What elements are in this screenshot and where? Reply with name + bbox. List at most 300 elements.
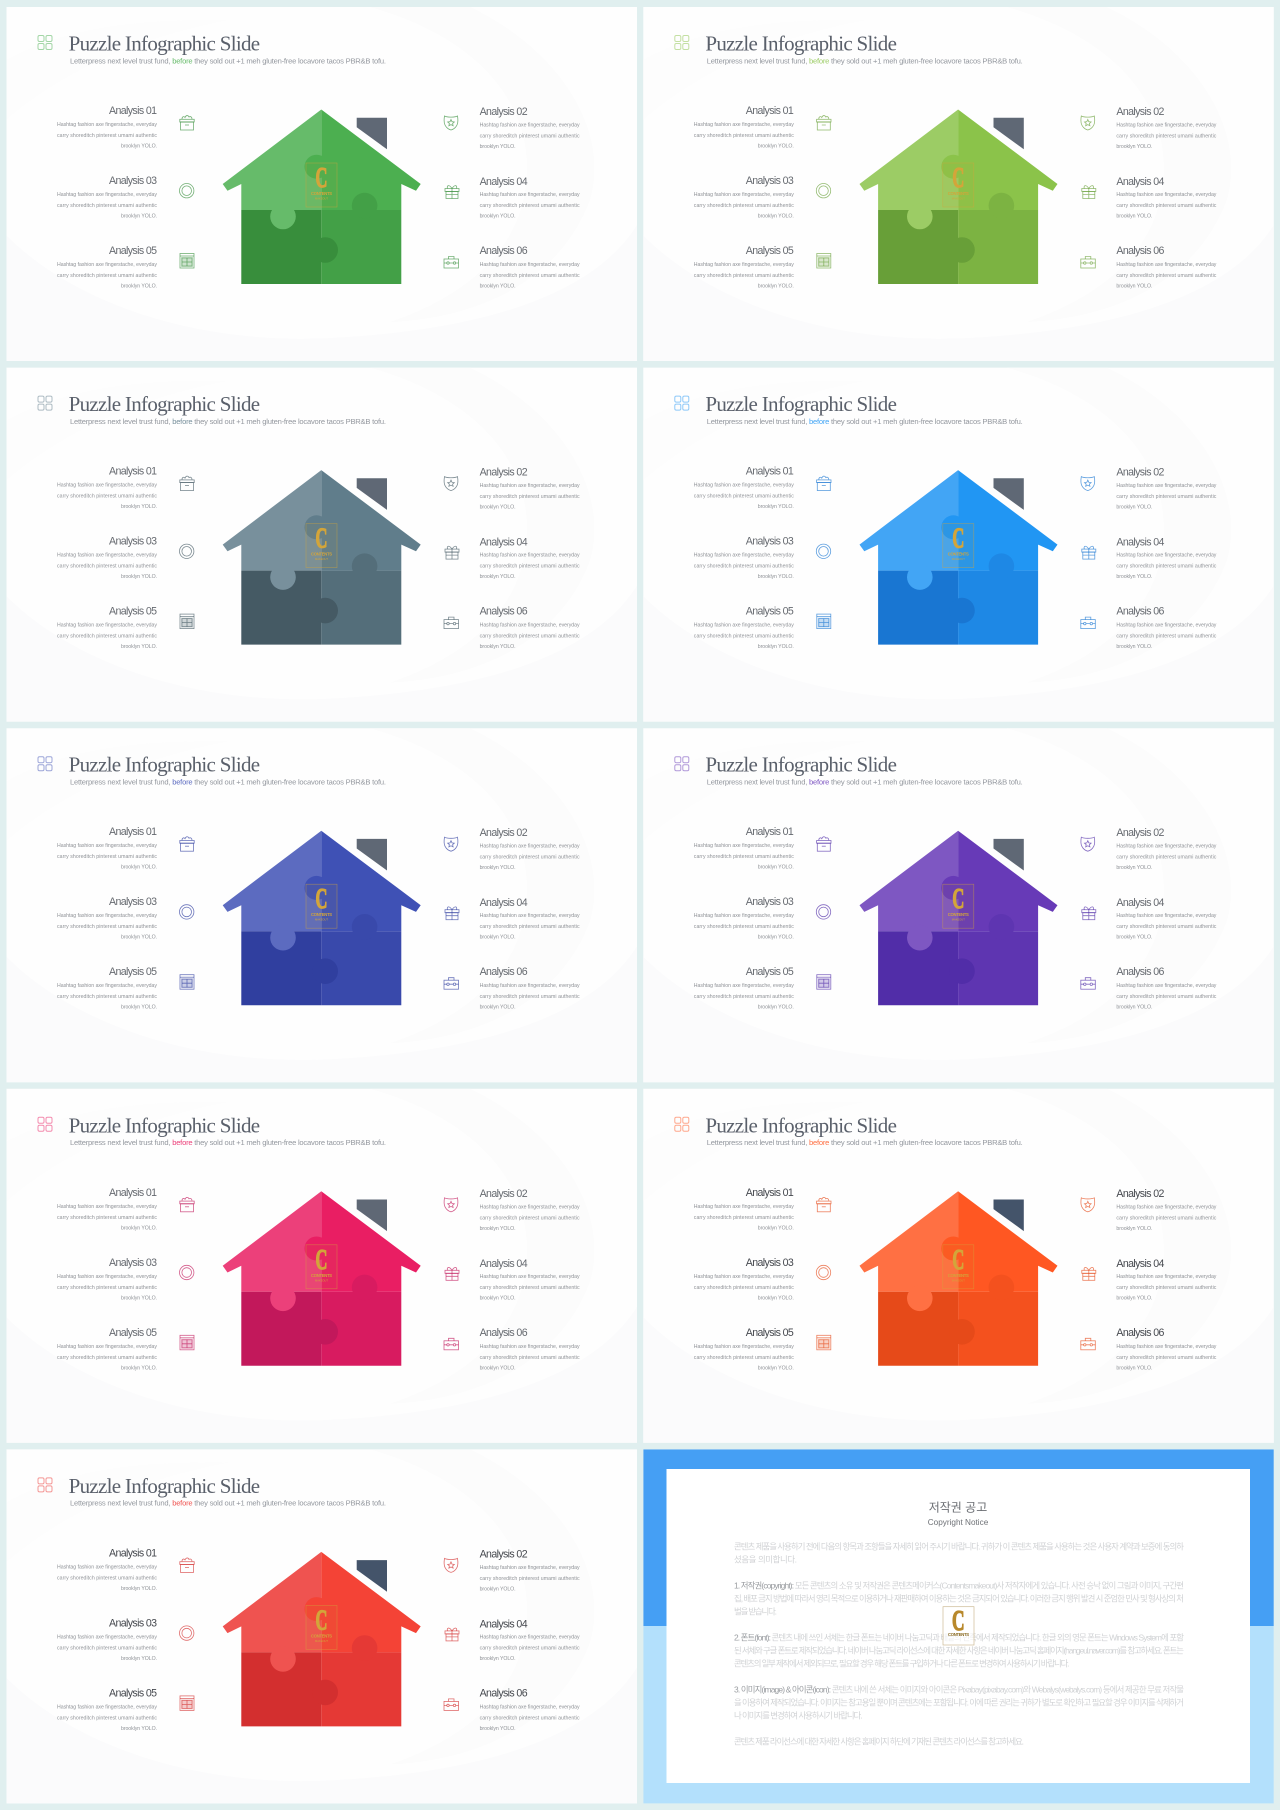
watermark logo: C [316,162,327,194]
text block: analysis 01: carry shoreditch pinterest umami authentic [694,1215,794,1221]
icon: calendar [180,254,194,268]
text block: analysis 06: Hashtag fashion axe fingerstache, everyday [1116,1344,1217,1350]
subheading: Copyright Notice [928,1518,989,1527]
watermark logo: C [952,1606,965,1637]
icon: gift [445,1267,459,1280]
icon: life ring [180,184,194,198]
text block: analysis 02: Analysis 02 [480,1548,528,1560]
text block: analysis 02 [480,827,580,871]
text block: analysis 05: Analysis 05 [746,1327,794,1339]
text block: analysis 04: Hashtag fashion axe fingerstache, everyday [480,1634,580,1640]
text block: analysis 02: Analysis 02 [480,467,528,479]
text block: analysis 03: Analysis 03 [109,1617,157,1629]
text block: analysis 06 [480,1687,580,1732]
icon: header grid [675,396,689,410]
text block: analysis 03: Hashtag fashion axe fingerstache, everyday [57,553,157,559]
text block: analysis 06: Hashtag fashion axe fingerstache, everyday [480,262,580,268]
title: Puzzle Infographic Slide [705,32,897,56]
subtitle: Letterpress next level trust fund, before they sold out +1 meh gluten-free locavore tacos PBR&B tofu. [70,1138,386,1147]
text block: analysis 01: Analysis 01 [109,105,157,117]
subtitle: Letterpress next level trust fund, before they sold out +1 meh gluten-free locavore tacos PBR&B tofu. [707,1138,1023,1147]
icon: box [817,837,831,851]
text block: analysis 04: Hashtag fashion axe fingerstache, everyday [480,913,580,919]
icon: header grid [38,1478,52,1492]
text block: analysis 04: Hashtag fashion axe fingerstache, everyday [480,553,580,559]
text block: analysis 04: Analysis 04 [480,1618,528,1630]
text block: analysis 01: Analysis 01 [109,826,157,838]
watermark logo: C [316,1605,327,1637]
text block: analysis 04 [480,176,580,220]
text block: analysis 01: Analysis 01 [746,105,794,117]
text block: analysis 01: Analysis 01 [109,466,157,478]
watermark logo: C [316,523,327,555]
text block: analysis 01: carry shoreditch pinterest umami authentic [57,494,157,500]
text block: analysis 04: brooklyn YOLO. [480,574,516,580]
text block: analysis 05: Hashtag fashion axe fingerstache, everyday [57,1704,157,1710]
watermark logo: CONTENTS [311,552,332,557]
text block: analysis 03: brooklyn YOLO. [121,214,157,220]
text block: analysis 03: Analysis 03 [109,536,157,548]
text block: analysis 01: carry shoreditch pinterest umami authentic [57,1575,157,1581]
panel: light green puzzle house slide [643,7,1274,361]
text block: analysis 01: carry shoreditch pinterest umami authentic [57,133,157,139]
title: Puzzle Infographic Slide [69,32,260,56]
text block: analysis 04 [480,897,580,941]
text block: analysis 05: carry shoreditch pinterest umami authentic [694,634,794,640]
text block: analysis 03: carry shoreditch pinterest umami authentic [694,924,794,930]
text block: analysis 05 [57,1687,157,1732]
text block: analysis 06: Analysis 06 [1116,1327,1164,1339]
text block: analysis 05: Analysis 05 [109,245,157,257]
text block: analysis 03: brooklyn YOLO. [758,1295,794,1301]
icon: gift [1082,546,1096,559]
text block: analysis 03: Hashtag fashion axe fingerstache, everyday [57,1634,157,1640]
text block: analysis 06: Hashtag fashion axe fingerstache, everyday [1116,262,1217,268]
text block: analysis 05: brooklyn YOLO. [758,1005,794,1011]
chimney [357,478,387,510]
text block: analysis 01: brooklyn YOLO. [121,504,157,510]
icon: header grid [38,36,52,50]
panel: pink puzzle house slide [6,1088,637,1443]
text block: analysis 01 [57,826,157,871]
text block: analysis 06 [1116,245,1217,290]
text block: font: 2. 폰트(font): 콘텐츠 내에 쓰인 서체는 한글 폰트는 네이버 나눔고딕과 배달의 민족에서 제작되었습니다. 한글 외의 영문 폰트는 Windows System에 포함 [734,1632,1184,1642]
text block: analysis 03 [694,896,794,941]
text block: analysis 05: Hashtag fashion axe fingerstache, everyday [57,262,157,268]
text block: analysis 06: brooklyn YOLO. [1116,1005,1152,1011]
watermark logo: MAKEOUT [952,1278,965,1282]
watermark logo [943,162,974,207]
panel: indigo puzzle house slide [6,728,637,1082]
text block: analysis 03: brooklyn YOLO. [121,1656,157,1662]
text block: analysis 05: carry shoreditch pinterest umami authentic [694,994,794,1000]
text block: analysis 02: brooklyn YOLO. [1116,144,1152,150]
text block: analysis 05: brooklyn YOLO. [758,284,794,290]
puzzle house [860,1191,1058,1366]
text block: analysis 02: Analysis 02 [480,1188,528,1200]
text block: analysis 02 [480,1548,580,1592]
text block: analysis 05 [57,966,157,1011]
icon: toolbox [1081,617,1095,629]
icon: header grid [675,757,689,771]
watermark logo [943,1244,974,1289]
icon: life ring [180,1626,194,1640]
watermark logo [306,162,337,207]
text block: analysis 02: brooklyn YOLO. [1116,865,1152,871]
text block: analysis 06: brooklyn YOLO. [480,1005,516,1011]
text block: analysis 05: Analysis 05 [109,966,157,978]
text block: analysis 05: brooklyn YOLO. [121,284,157,290]
subtitle: Letterpress next level trust fund, before they sold out +1 meh gluten-free locavore tacos PBR&B tofu. [707,417,1023,426]
text block: analysis 06: Hashtag fashion axe fingerstache, everyday [480,1704,580,1710]
text block: analysis 03: Analysis 03 [746,1257,794,1269]
icon: gift [1082,186,1096,198]
text block: analysis 01: Analysis 01 [109,1187,157,1199]
text block: analysis 02 [1116,467,1217,511]
icon: gift [445,907,459,920]
watermark logo [306,1605,337,1649]
text block: analysis 01 [694,826,794,871]
icon: shield [1081,116,1095,130]
title: Puzzle Infographic Slide [705,1113,897,1137]
text block: analysis 04: brooklyn YOLO. [480,1295,516,1301]
text block: copyright: 1. 저작권(copyright): 모든 콘텐츠의 소유 및 저작권은 콘텐츠메이커스(Contentsmakeout)사 저작자에게 있습니다. 사전 승낙 없이 그림과 이미지, 구간편 [734,1581,1184,1591]
chimney [357,1560,387,1592]
text block: analysis 04: brooklyn YOLO. [1116,574,1152,580]
icon: calendar [180,975,194,989]
icon: life ring [180,905,194,919]
text block: analysis 02: brooklyn YOLO. [480,505,516,511]
text block: analysis 05: Hashtag fashion axe fingerstache, everyday [57,983,157,989]
watermark logo [306,884,337,928]
watermark logo [943,884,974,928]
subtitle: Letterpress next level trust fund, before they sold out +1 meh gluten-free locavore tacos PBR&B tofu. [70,417,386,426]
text block: analysis 06: Analysis 06 [1116,966,1164,978]
text block: analysis 03: Analysis 03 [109,896,157,908]
text block: analysis 04 [480,1258,580,1301]
watermark logo: C [952,1244,964,1276]
text block: analysis 06: Hashtag fashion axe fingerstache, everyday [1116,983,1217,989]
text block: analysis 01: Analysis 01 [746,1187,794,1199]
text block: analysis 03 [57,175,157,220]
text block: analysis 01 [57,105,157,150]
text block: analysis 02: Hashtag fashion axe fingerstache, everyday [1116,1204,1217,1210]
text block: analysis 02: carry shoreditch pinterest umami authentic [1116,855,1217,861]
text block: analysis 06: brooklyn YOLO. [480,1365,516,1371]
text block: font: 콘텐츠의 일부 제작에서 제외되므로, 필요할 경우 해당 폰트를 구입하거나 다른 폰트로 변경하여 사용하시기 바랍니다. [734,1658,1070,1668]
text block: analysis 03: Hashtag fashion axe fingerstache, everyday [694,553,794,559]
text block: analysis 06: brooklyn YOLO. [480,644,516,650]
title: Puzzle Infographic Slide [69,1113,260,1137]
text block: analysis 02: Analysis 02 [480,106,528,118]
text block: analysis 02: carry shoreditch pinterest umami authentic [480,855,580,861]
icon: toolbox [444,617,458,629]
icon: calendar [180,1335,194,1350]
icon: shield [444,116,458,130]
text block: analysis 04: carry shoreditch pinterest umami authentic [480,1285,580,1291]
text block: analysis 03 [694,175,794,220]
icon: shield [444,1198,458,1212]
watermark logo: CONTENTS [948,1273,969,1278]
text block: analysis 02: brooklyn YOLO. [1116,505,1152,511]
text block: analysis 05: brooklyn YOLO. [121,644,157,650]
watermark logo: CONTENTS [948,1632,969,1637]
text block: analysis 04: brooklyn YOLO. [480,935,516,941]
icon: box [180,1197,194,1212]
text block: analysis 06: Analysis 06 [480,1327,528,1339]
icon: shield [1081,477,1095,491]
icon: header grid [38,757,52,771]
text block: analysis 05: carry shoreditch pinterest umami authentic [57,994,157,1000]
text block: analysis 02: carry shoreditch pinterest umami authentic [1116,134,1217,140]
text block: analysis 02: Analysis 02 [1116,467,1164,479]
text block: analysis 05: Hashtag fashion axe fingerstache, everyday [694,623,794,629]
panel: blue grey puzzle house slide [6,368,637,722]
watermark logo [943,523,974,568]
text block: analysis 06: Hashtag fashion axe fingerstache, everyday [1116,623,1217,629]
text block: copyright: 집, 배포 금지 방법에 따라서 영리 목적으로 이용하거나 재판매하여 이용하는 것은 금지되어 있습니다. 이러한 금지 행위 발견 시 준엄한 민사 및 형사상의 처 [734,1593,1184,1603]
text block: analysis 02: brooklyn YOLO. [480,1226,516,1232]
text block: intro: 콘텐츠 제품을 사용하기 전에 다음의 항목과 조항들을 자세히 읽어 주시기 바랍니다. 귀하가 이 콘텐츠 제품을 사용하는 것은 사용자 계약과 보증에 동의하 [734,1542,1184,1552]
text block: analysis 06: Analysis 06 [480,606,528,618]
text block: analysis 06: Hashtag fashion axe fingerstache, everyday [480,623,580,629]
text block: analysis 03: Analysis 03 [109,175,157,187]
puzzle house [860,470,1058,645]
text block: analysis 01: carry shoreditch pinterest umami authentic [694,854,794,860]
text block: analysis 03: Hashtag fashion axe fingerstache, everyday [694,913,794,919]
text block: analysis 03: carry shoreditch pinterest umami authentic [694,203,794,209]
text block: analysis 02: Hashtag fashion axe fingerstache, everyday [480,122,580,128]
text block: analysis 04 [1116,897,1217,941]
text block: analysis 05: Analysis 05 [746,966,794,978]
puzzle house [223,110,421,284]
text block: analysis 02: carry shoreditch pinterest umami authentic [480,1215,580,1221]
text block: analysis 01: Hashtag fashion axe fingerstache, everyday [57,122,157,128]
text block: analysis 05 [57,606,157,650]
text block: analysis 05 [57,245,157,290]
text block: analysis 06: Analysis 06 [480,245,528,257]
text block: analysis 04: Analysis 04 [1116,176,1164,188]
text block: analysis 03 [694,536,794,580]
text block: analysis 02: Analysis 02 [1116,1188,1164,1200]
watermark logo: MAKEOUT [315,557,328,561]
icon: gift [445,546,459,559]
chimney [994,1200,1024,1231]
text block: analysis 03: Analysis 03 [746,896,794,908]
text block: analysis 05: carry shoreditch pinterest umami authentic [57,1715,157,1721]
text block: analysis 06: Analysis 06 [480,1687,528,1699]
watermark logo: MAKEOUT [315,1278,328,1282]
text block: analysis 01 [57,1547,157,1592]
text block: analysis 02 [1116,827,1217,871]
text block: font: 된 서체와 구글 폰트로 제작되었습니다. 네이버 나눔고딕 라이선스에 대한 자세한 사항은 네이버 나눔고딕 홈페이지(hangeul.naver.com)를 참고하세요. 폰트는 [734,1646,1184,1656]
text block: analysis 02: brooklyn YOLO. [1116,1226,1152,1232]
watermark logo: CONTENTS [311,191,332,196]
watermark logo: MAKEOUT [315,1639,328,1643]
icon: calendar [817,975,831,989]
text block: analysis 03 [57,896,157,941]
text block: analysis 03 [694,1257,794,1301]
text block: analysis 02: Analysis 02 [1116,106,1164,118]
icon: toolbox [444,256,458,268]
text block: copyright: 벌을 받습니다. [734,1607,777,1617]
text block: analysis 04: Analysis 04 [480,897,528,909]
text block: analysis 01: carry shoreditch pinterest umami authentic [694,133,794,139]
text block: analysis 02: carry shoreditch pinterest umami authentic [480,1576,580,1582]
text block: analysis 04: brooklyn YOLO. [1116,1295,1152,1301]
icon: shield [444,837,458,851]
watermark logo: MAKEOUT [952,557,965,561]
icon: life ring [816,544,831,558]
icon: box [180,1558,194,1572]
text block: analysis 06 [480,1327,580,1371]
text block: analysis 02 [480,106,580,150]
watermark logo: CONTENTS [948,552,969,557]
text block: analysis 03 [57,1617,157,1662]
text block: analysis 05 [57,1327,157,1371]
watermark logo: MAKEOUT [315,196,328,200]
text block: analysis 06: carry shoreditch pinterest umami authentic [1116,634,1217,640]
icon: life ring [816,905,831,919]
text block: analysis 01: Hashtag fashion axe fingerstache, everyday [57,483,157,489]
text block: image and icon: 3. 이미지(image) & 아이콘(icon): 콘텐츠 내에 쓴 서체는 이미지와 아이콘은 Pixabay(pixabay.com)와 Webalys(webalys.com) 등에서 제공한 무료 저작물 [734,1684,1184,1694]
text block: analysis 02: brooklyn YOLO. [480,1586,516,1592]
text block: analysis 06: Analysis 06 [480,966,528,978]
icon: life ring [180,1265,194,1280]
icon: box [817,476,831,491]
watermark logo: CONTENTS [948,191,969,196]
text block: analysis 01: Hashtag fashion axe fingerstache, everyday [694,843,794,849]
text block: analysis 02: carry shoreditch pinterest umami authentic [1116,494,1217,500]
title: Puzzle Infographic Slide [69,1474,260,1498]
text block: analysis 01: brooklyn YOLO. [121,1586,157,1592]
text block: copyright [734,1581,1184,1617]
text block: analysis 06 [480,245,580,290]
text block: analysis 01: brooklyn YOLO. [758,504,794,510]
text block: analysis 01: Analysis 01 [746,466,794,478]
subtitle: Letterpress next level trust fund, before they sold out +1 meh gluten-free locavore tacos PBR&B tofu. [70,56,386,65]
text block: analysis 05: carry shoreditch pinterest umami authentic [694,1355,794,1361]
text block: analysis 01: carry shoreditch pinterest umami authentic [57,1215,157,1221]
text block: analysis 03: carry shoreditch pinterest umami authentic [57,924,157,930]
text block: analysis 05: carry shoreditch pinterest umami authentic [694,273,794,279]
text block: analysis 02 [480,1188,580,1232]
text block: analysis 05 [694,1327,794,1371]
text block: analysis 04: carry shoreditch pinterest umami authentic [1116,564,1217,570]
icon: shield [444,1558,458,1572]
text block: analysis 04 [1116,537,1217,580]
text block: analysis 05: brooklyn YOLO. [758,644,794,650]
text block: analysis 02: Analysis 02 [1116,827,1164,839]
text block: analysis 03: brooklyn YOLO. [758,214,794,220]
text block: analysis 06: brooklyn YOLO. [1116,644,1152,650]
text block: analysis 06: brooklyn YOLO. [1116,284,1152,290]
text block: analysis 02: carry shoreditch pinterest umami authentic [480,494,580,500]
text block: analysis 03: carry shoreditch pinterest umami authentic [694,564,794,570]
text block: analysis 03 [57,1257,157,1301]
text block: analysis 05: Analysis 05 [109,606,157,618]
title: Puzzle Infographic Slide [705,753,897,777]
text block: image and icon [734,1684,1184,1720]
text block: analysis 03: carry shoreditch pinterest umami authentic [57,1285,157,1291]
text block: analysis 04: Analysis 04 [480,176,528,188]
text block: analysis 04: carry shoreditch pinterest umami authentic [1116,1285,1217,1291]
text block: analysis 03 [57,536,157,580]
text block: analysis 05: carry shoreditch pinterest umami authentic [57,634,157,640]
text block: analysis 06: carry shoreditch pinterest umami authentic [480,273,580,279]
text block: analysis 04: carry shoreditch pinterest umami authentic [1116,924,1217,930]
text block: analysis 03: Hashtag fashion axe fingerstache, everyday [694,1274,794,1280]
icon: gift [445,186,459,198]
text block: analysis 01: brooklyn YOLO. [121,865,157,871]
text block: analysis 04: Analysis 04 [480,1258,528,1270]
icon: shield [1081,837,1095,851]
text block: analysis 03: Hashtag fashion axe fingerstache, everyday [57,913,157,919]
text block: analysis 03: carry shoreditch pinterest umami authentic [57,1645,157,1651]
watermark logo [306,1244,337,1289]
text block: analysis 06: brooklyn YOLO. [480,1726,516,1732]
chimney [994,839,1024,870]
text block: analysis 05: Hashtag fashion axe fingerstache, everyday [57,1344,157,1350]
text block: analysis 03: Analysis 03 [109,1257,157,1269]
text block: analysis 04: Hashtag fashion axe fingerstache, everyday [1116,192,1217,198]
subtitle: Letterpress next level trust fund, before they sold out +1 meh gluten-free locavore tacos PBR&B tofu. [707,778,1023,787]
icon: gift [1082,1267,1096,1280]
text block: analysis 04 [1116,176,1217,220]
text block: intro [734,1542,1184,1564]
text block: analysis 02: Hashtag fashion axe fingerstache, everyday [480,844,580,850]
text block: analysis 06: carry shoreditch pinterest umami authentic [1116,994,1217,1000]
text block: analysis 01: brooklyn YOLO. [758,865,794,871]
text block: analysis 04: carry shoreditch pinterest umami authentic [1116,203,1217,209]
icon: gift [1082,907,1096,920]
icon: box [180,116,194,130]
text block: analysis 01: Hashtag fashion axe fingerstache, everyday [57,1564,157,1570]
text block: analysis 04: Analysis 04 [480,537,528,549]
text block: analysis 04: Hashtag fashion axe fingerstache, everyday [1116,553,1217,559]
panel: green puzzle house slide [6,7,637,361]
watermark logo: CONTENTS [311,1633,332,1638]
text block: analysis 01 [694,105,794,150]
text block: analysis 05: brooklyn YOLO. [121,1005,157,1011]
text block: analysis 04: Analysis 04 [1116,1258,1164,1270]
icon: calendar [817,614,831,629]
text block: analysis 05: carry shoreditch pinterest umami authentic [57,1355,157,1361]
text block: analysis 04: Hashtag fashion axe fingerstache, everyday [480,1274,580,1280]
icon: shield [444,477,458,491]
watermark logo: MAKEOUT [952,918,965,922]
watermark logo: CONTENTS [311,1273,332,1278]
text block: analysis 05: brooklyn YOLO. [121,1726,157,1732]
subtitle: Letterpress next level trust fund, before they sold out +1 meh gluten-free locavore tacos PBR&B tofu. [70,778,386,787]
text block: analysis 05: Analysis 05 [746,245,794,257]
text block: analysis 01: brooklyn YOLO. [758,144,794,150]
text block: analysis 05: Hashtag fashion axe fingerstache, everyday [694,1344,794,1350]
text block: analysis 03: Analysis 03 [746,175,794,187]
puzzle house [223,1552,421,1726]
text block: analysis 01: carry shoreditch pinterest umami authentic [694,494,794,500]
panel: orange puzzle house slide [643,1088,1274,1443]
text block: analysis 02: Hashtag fashion axe fingerstache, everyday [480,483,580,489]
text block: analysis 04: Hashtag fashion axe fingerstache, everyday [1116,1274,1217,1280]
icon: life ring [816,1265,831,1280]
text block: analysis 05 [694,966,794,1011]
title: Puzzle Infographic Slide [69,753,260,777]
text block: analysis 03: brooklyn YOLO. [121,935,157,941]
icon: header grid [675,1117,689,1131]
text block: analysis 02: carry shoreditch pinterest umami authentic [480,134,580,140]
title: Puzzle Infographic Slide [69,392,260,416]
